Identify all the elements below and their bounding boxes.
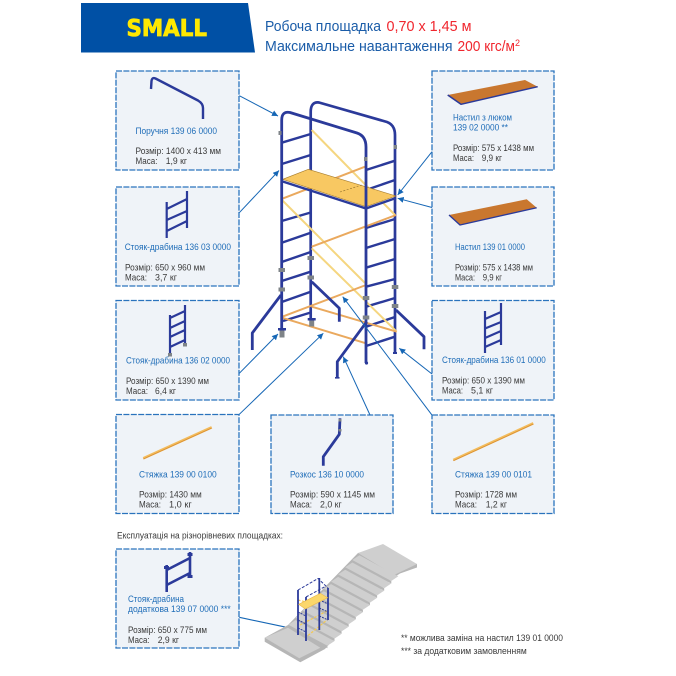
handrail text: Маса: — [136, 156, 158, 166]
handrail text: 1,9 кг — [166, 156, 188, 166]
icon: deck — [449, 199, 537, 225]
header specifications: Робоча площадка — [265, 18, 382, 35]
deck text: Настил 139 01 0000 — [455, 242, 525, 252]
clamps and casters — [278, 131, 398, 379]
header specifications: Максимальне навантаження — [265, 38, 452, 55]
icon: handrail — [151, 78, 203, 119]
icon: additional ladder — [164, 552, 192, 592]
ladder 136 02 text: Маса: — [126, 386, 148, 396]
ladder 136 01 text — [442, 355, 546, 396]
icon: ladder 136 03 — [167, 191, 187, 238]
tie 0101 text: Розмір: 1728 мм — [455, 490, 517, 500]
handrail text: Розмір: 1400 х 413 мм — [136, 146, 221, 156]
footnotes: ** можлива заміна на настил 139 01 0000 — [401, 633, 563, 643]
icon: tie 0100 — [143, 427, 212, 459]
header specifications: 2 — [515, 38, 520, 48]
handrail text: Поручня 139 06 0000 — [136, 126, 217, 136]
ladder 136 03 text: Маса: — [125, 272, 147, 282]
front posts and front handrail — [282, 112, 366, 363]
tie 0100 text: Маса: — [139, 500, 161, 510]
ladder 136 02 text: 6,4 кг — [155, 386, 177, 396]
tie 0101 text: Стяжка 139 00 0101 — [455, 470, 532, 480]
additional ladder text — [128, 594, 231, 645]
ladder 136 01 text: 5,1 кг — [471, 386, 494, 396]
tie 0101 text — [455, 470, 532, 510]
ladder 136 02 text — [126, 356, 230, 396]
additional ladder text: 2,9 кг — [158, 635, 180, 645]
outrigger text: Розмір: 590 х 1145 мм — [290, 490, 375, 500]
header specifications: 200 кгс/м — [458, 38, 515, 55]
ladder 136 03 text: 3,7 кг — [155, 272, 178, 282]
deck with hatch text: Настил з люком — [453, 113, 512, 123]
panel: ladder 136 03 — [116, 187, 239, 286]
panel: additional ladder — [116, 549, 239, 648]
icon: ladder 136 02 — [168, 305, 187, 356]
header specifications — [265, 18, 520, 55]
header banner: SMALL — [126, 16, 207, 42]
outrigger text: 2,0 кг — [320, 500, 342, 510]
tie 0101 text: 1,2 кг — [486, 500, 508, 510]
diagonal braces — [281, 130, 397, 343]
footnotes — [401, 633, 563, 656]
deck text: Маса: — [455, 273, 475, 283]
staircase with scaffold — [265, 544, 417, 662]
footnotes: *** за додатковим замовленням — [401, 646, 527, 656]
additional ladder text: додаткова 139 07 0000 *** — [128, 604, 231, 614]
ladder 136 01 text: Розмір: 650 х 1390 мм — [442, 376, 525, 386]
platform — [283, 169, 396, 208]
outrigger text: Маса: — [290, 500, 312, 510]
header specifications: 0,70 х 1,45 м — [386, 18, 472, 35]
ladder 136 03 text — [125, 242, 231, 282]
icon: outrigger — [323, 418, 342, 466]
deck text — [455, 242, 533, 283]
panel: deck with hatch — [432, 71, 554, 170]
panel: tie 139 00 0101 — [432, 415, 554, 514]
handrail text — [136, 126, 221, 166]
panel: outrigger — [271, 415, 393, 514]
ladder 136 03 text: Розмір: 650 х 960 мм — [125, 262, 205, 272]
additional ladder text: Маса: — [128, 635, 150, 645]
outrigger text — [290, 470, 375, 510]
panel: handrail — [116, 71, 239, 170]
deck with hatch text: Розмір: 575 х 1438 мм — [453, 143, 534, 153]
deck with hatch text: 9,9 кг — [482, 153, 503, 163]
arrows — [239, 96, 432, 628]
ladder 136 02 text: Стояк-драбина 136 02 0000 — [126, 356, 230, 366]
tie 0100 text — [139, 470, 217, 510]
tie 0100 text: Стяжка 139 00 0100 — [139, 470, 217, 480]
deck with hatch text: Маса: — [453, 153, 474, 163]
panel: ladder 136 01 — [432, 300, 554, 400]
deck with hatch text — [453, 113, 534, 163]
header banner — [81, 3, 255, 52]
additional ladder text: Стояк-драбина — [128, 594, 184, 604]
tie 0101 text: Маса: — [455, 500, 477, 510]
deck text: Розмір: 575 х 1438 мм — [455, 263, 533, 273]
icon: ladder 136 01 — [485, 303, 501, 353]
panel: ladder 136 02 — [116, 300, 239, 400]
scaffold tower — [252, 102, 424, 379]
back posts and back handrail — [282, 102, 395, 353]
ladder 136 03 text: Стояк-драбина 136 03 0000 — [125, 242, 231, 252]
tie 0100 text: Розмір: 1430 мм — [139, 490, 202, 500]
small scaffold — [298, 578, 328, 641]
deck with hatch text: 139 02 0000 ** — [453, 123, 508, 133]
outrigger text: Розкос 136 10 0000 — [290, 470, 364, 480]
ladder 136 01 text: Стояк-драбина 136 01 0000 — [442, 355, 546, 365]
tie 0100 text: 1,0 кг — [169, 500, 192, 510]
outriggers — [252, 282, 424, 377]
ladder 136 01 text: Маса: — [442, 386, 463, 396]
panel: deck — [432, 187, 554, 286]
icon: tie 0101 — [453, 423, 533, 461]
staircase — [265, 544, 417, 662]
icon: deck with hatch — [448, 80, 538, 104]
deck text: 9,9 кг — [483, 273, 503, 283]
panel: tie 139 00 0100 — [116, 414, 239, 514]
heading: multi-level use: Експлуатація на різнорівневих площадках: — [117, 530, 283, 540]
ladder 136 02 text: Розмір: 650 х 1390 мм — [126, 376, 209, 386]
additional ladder text: Розмір: 650 х 775 мм — [128, 625, 207, 635]
